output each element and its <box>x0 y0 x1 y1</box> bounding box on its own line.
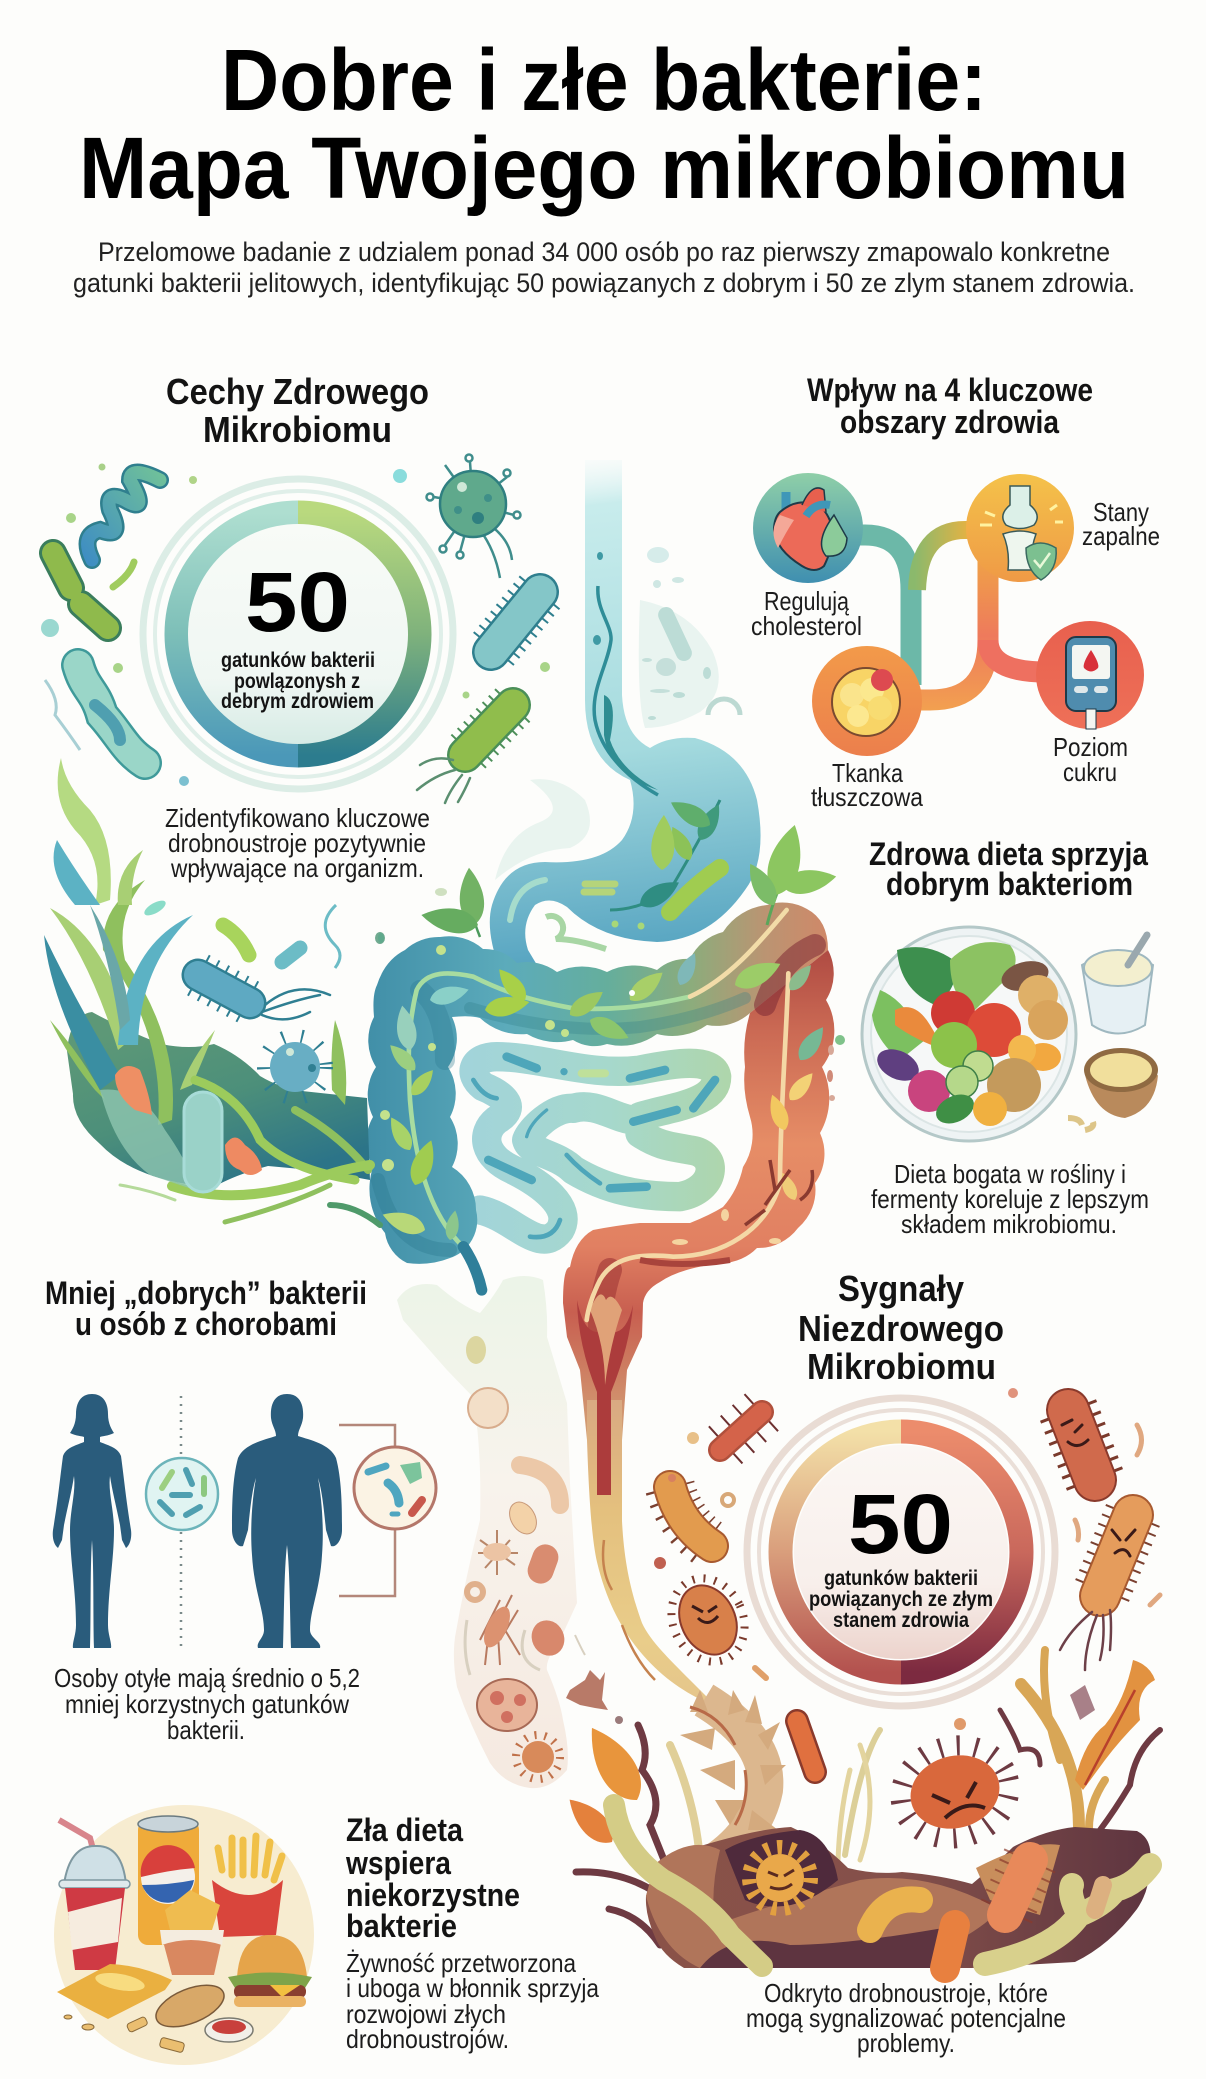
pale translucent blade <box>100 1090 195 1190</box>
good bacteria around donut <box>41 454 550 803</box>
icon: amoeba rod <box>78 665 145 763</box>
labels: Poziom <box>1053 732 1128 762</box>
icon: heart circle <box>753 473 863 583</box>
icon: right face rod <box>1060 1515 1135 1670</box>
heading: health areas <box>807 372 1093 440</box>
colon leaves <box>379 945 830 1264</box>
subtitle: gatunki bakterii jelitowych, identyfikując 50 powiązanych z dobrym i 50 ze zlym stanem zdrowia. <box>73 268 1135 298</box>
ground <box>646 1827 1150 1968</box>
text: healthy diet: Dieta bogata w rośliny i <box>894 1159 1126 1189</box>
dip <box>205 2018 253 2042</box>
broccoli <box>931 1089 979 1129</box>
body text: good microbes: drobnoustroje pozytywnie <box>168 828 426 858</box>
orange plant <box>1075 1660 1155 1790</box>
carrot <box>895 1007 945 1050</box>
body comparison <box>53 1394 436 1648</box>
bad bacteria around donut <box>566 1388 1160 1730</box>
body text: good microbes: Zidentyfikowano kluczowe <box>165 803 430 833</box>
orange blobs <box>115 1066 152 1115</box>
donut caption <box>221 649 375 713</box>
teal rod bacterium <box>198 975 330 1019</box>
donut: 50 good species <box>143 479 453 789</box>
icon: orange rod <box>670 1487 712 1546</box>
heading: health areas: Wpływ na 4 kluczowe <box>807 372 1093 408</box>
text: bad diet: rozwojowi złych <box>346 1999 506 2029</box>
icon: spiral bacterium <box>88 472 160 560</box>
donut: 50 bad species <box>747 1398 1055 1706</box>
icon: healthy bacteria sample <box>146 1458 218 1530</box>
icon: small angry coccus <box>658 1566 758 1674</box>
healthy food plate <box>862 927 1158 1141</box>
icon: angry red bacterium <box>890 1733 1020 1851</box>
pale cloud near esophagus <box>639 547 740 728</box>
icon: unhealthy bacteria sample <box>354 1447 436 1529</box>
dark wiggles <box>576 1710 1160 1945</box>
labels <box>751 497 1160 812</box>
dotted divider <box>180 1396 182 1648</box>
unhealthy landscape <box>561 1650 1160 1968</box>
heading: health areas: obszary zdrowia <box>840 404 1060 440</box>
rectum tube <box>577 1294 722 1712</box>
digestive tract illustration <box>366 460 845 1712</box>
donut caption: powlązonysh z <box>234 670 360 693</box>
donut caption: stanem zdrowia <box>833 1609 969 1632</box>
icon: teal spiky rod <box>491 592 540 652</box>
text: unhealthy microbes: problemy. <box>857 2028 955 2058</box>
grains <box>987 1058 1041 1112</box>
labels: cukru <box>1063 757 1117 787</box>
subtitle <box>73 237 1135 298</box>
icon: bottom rods <box>870 1860 1103 1968</box>
yogurt cup <box>1082 935 1153 1034</box>
icon: round green bacterium <box>426 454 520 578</box>
greens <box>897 947 960 1005</box>
heading: healthy diet <box>869 836 1149 902</box>
donut caption: gatunków bakterii <box>221 649 375 672</box>
burger <box>228 1935 312 2007</box>
donut caption: gatunków bakterii <box>824 1567 978 1590</box>
heading: bad diet: wspiera <box>345 1845 452 1881</box>
donut caption: powiązanych ze złym <box>809 1588 993 1611</box>
microbes in rot <box>465 1336 585 1779</box>
heading: healthy microbiome: Cechy Zdrowego <box>166 371 429 412</box>
icon: male silhouette <box>232 1394 342 1648</box>
text: obese comparison: mniej korzystnych gatunków <box>65 1689 349 1719</box>
text: unhealthy microbes: mogą sygnalizować potencjalne <box>746 2003 1066 2033</box>
icon: fat tissue circle <box>812 646 922 756</box>
bracket <box>339 1425 395 1596</box>
large intestine right and lower <box>563 950 834 1440</box>
labels: Regulują <box>764 586 849 616</box>
labels: Stany <box>1093 497 1149 527</box>
labels: cholesterol <box>751 611 862 641</box>
capsule <box>184 1092 222 1192</box>
icon: red legged rod <box>720 1412 762 1450</box>
pale green roots <box>614 1805 1150 1966</box>
text: unhealthy microbes <box>746 1978 1066 2058</box>
connectors <box>855 530 1045 700</box>
text: bad diet: drobnoustrojów. <box>346 2024 509 2054</box>
heading: unhealthy microbiome: Sygnały <box>838 1268 964 1309</box>
body text: good microbes <box>165 803 430 883</box>
icon: joint circle <box>966 474 1074 582</box>
decorative dots and shards <box>566 1388 1160 1730</box>
wheat strands <box>670 1650 1105 1860</box>
text: obese comparison <box>54 1663 360 1745</box>
heading: bad diet: bakterie <box>346 1908 457 1944</box>
icon: glucose meter circle <box>1036 621 1144 729</box>
small intestine <box>473 1057 717 1239</box>
labels: Tkanka <box>832 758 903 788</box>
seaweed scene <box>44 758 384 1225</box>
labels: zapalne <box>1082 521 1160 551</box>
tomatoes and apples <box>931 991 975 1035</box>
orange pieces <box>1025 1043 1061 1071</box>
icon: yellow spiky bacterium <box>749 1847 811 1909</box>
heading: healthy diet: Zdrowa dieta sprzyja <box>869 836 1149 872</box>
donut caption: debrym zdrowiem <box>221 690 374 713</box>
blades <box>44 758 346 1125</box>
labels: tłuszczowa <box>811 782 923 812</box>
text: healthy diet: składem mikrobiomu. <box>901 1209 1117 1239</box>
icon: orange rod in air <box>797 1721 815 1772</box>
peanut snack <box>150 1977 230 2035</box>
eggplant <box>872 1043 924 1087</box>
cookies <box>1018 975 1058 1015</box>
fries <box>212 1836 283 1937</box>
heading: fewer good bacteria <box>45 1275 367 1342</box>
crumbs <box>64 2015 185 2053</box>
heading: unhealthy microbiome <box>798 1268 1004 1387</box>
text: bad diet <box>346 1948 599 2054</box>
pale rot column <box>397 1276 585 1788</box>
heading: fewer good bacteria: Mniej „dobrych” bakterii <box>45 1275 367 1311</box>
heading: healthy microbiome: Mikrobiomu <box>203 409 392 450</box>
decorative dots <box>41 464 550 786</box>
junk food illustration <box>54 1805 314 2065</box>
heading: bad diet: Zła dieta <box>346 1812 464 1848</box>
subtitle: Przelomowe badanie z udzialem ponad 34 000 osób po raz pierwszy zmapowalo konkretne <box>98 237 1110 267</box>
colon vine green <box>409 910 788 1320</box>
health connector diagram <box>751 473 1160 812</box>
text: healthy diet <box>871 1159 1149 1239</box>
small capsules <box>223 925 249 955</box>
large intestine left and transverse <box>366 903 828 1264</box>
heading: healthy microbiome <box>166 371 429 450</box>
colon shading <box>378 945 815 1330</box>
soda cup <box>59 1820 130 1970</box>
text: unhealthy microbes: Odkryto drobnoustroje, które <box>764 1978 1048 2008</box>
heading: bad diet <box>345 1812 520 1944</box>
title: Dobre i złe bakterie: <box>221 32 987 129</box>
fermented bowl <box>1084 1048 1158 1118</box>
esophagus and stomach <box>490 460 761 970</box>
heading: healthy diet: dobrym bakteriom <box>886 866 1133 902</box>
icon: double rod <box>53 553 108 628</box>
bag <box>57 1964 172 2019</box>
body text: good microbes: wpływające na organizm. <box>170 853 424 883</box>
soda can <box>138 1816 199 1945</box>
dark crown behind sun <box>725 1830 838 1907</box>
cucumber <box>963 1051 993 1081</box>
heading: fewer good bacteria: u osób z chorobami <box>75 1306 337 1342</box>
orange leaves <box>577 1718 652 1809</box>
brown hills <box>646 1845 1000 1968</box>
text: healthy diet: fermenty koreluje z lepszym <box>871 1184 1149 1214</box>
heading: unhealthy microbiome: Mikrobiomu <box>807 1346 996 1387</box>
dark green hill <box>67 1012 370 1187</box>
text: bad diet: Żywność przetworzona <box>346 1948 576 1978</box>
stomach leaves and rod <box>510 794 726 930</box>
icon: spiral bacterium body <box>88 472 160 560</box>
text: bad diet: i uboga w błonnik sprzyja <box>346 1973 599 2003</box>
mushroom <box>998 956 1052 996</box>
icon: green spiky rod <box>417 705 513 803</box>
icon: top right rod face <box>1062 1410 1095 1480</box>
title <box>79 32 1129 217</box>
heading: bad diet: niekorzystne <box>346 1877 520 1913</box>
text: obese comparison: bakterii. <box>167 1715 245 1745</box>
squash <box>973 1092 1007 1126</box>
big number: 50 <box>848 1477 953 1571</box>
chips bowl <box>160 1890 224 1975</box>
big number: 50 <box>245 555 350 649</box>
donut caption <box>809 1567 993 1632</box>
title: Mapa Twojego mikrobiomu <box>79 120 1129 217</box>
heading: unhealthy microbiome: Niezdrowego <box>798 1308 1004 1349</box>
pale cloud left of stomach <box>495 779 590 880</box>
coccus <box>264 1036 326 1098</box>
beet <box>908 1070 950 1112</box>
thorny tube curl <box>680 1690 786 1870</box>
text: obese comparison: Osoby otyłe mają średnio o 5,2 <box>54 1663 360 1693</box>
sprigs <box>375 821 845 1101</box>
icon: female silhouette <box>53 1394 131 1648</box>
